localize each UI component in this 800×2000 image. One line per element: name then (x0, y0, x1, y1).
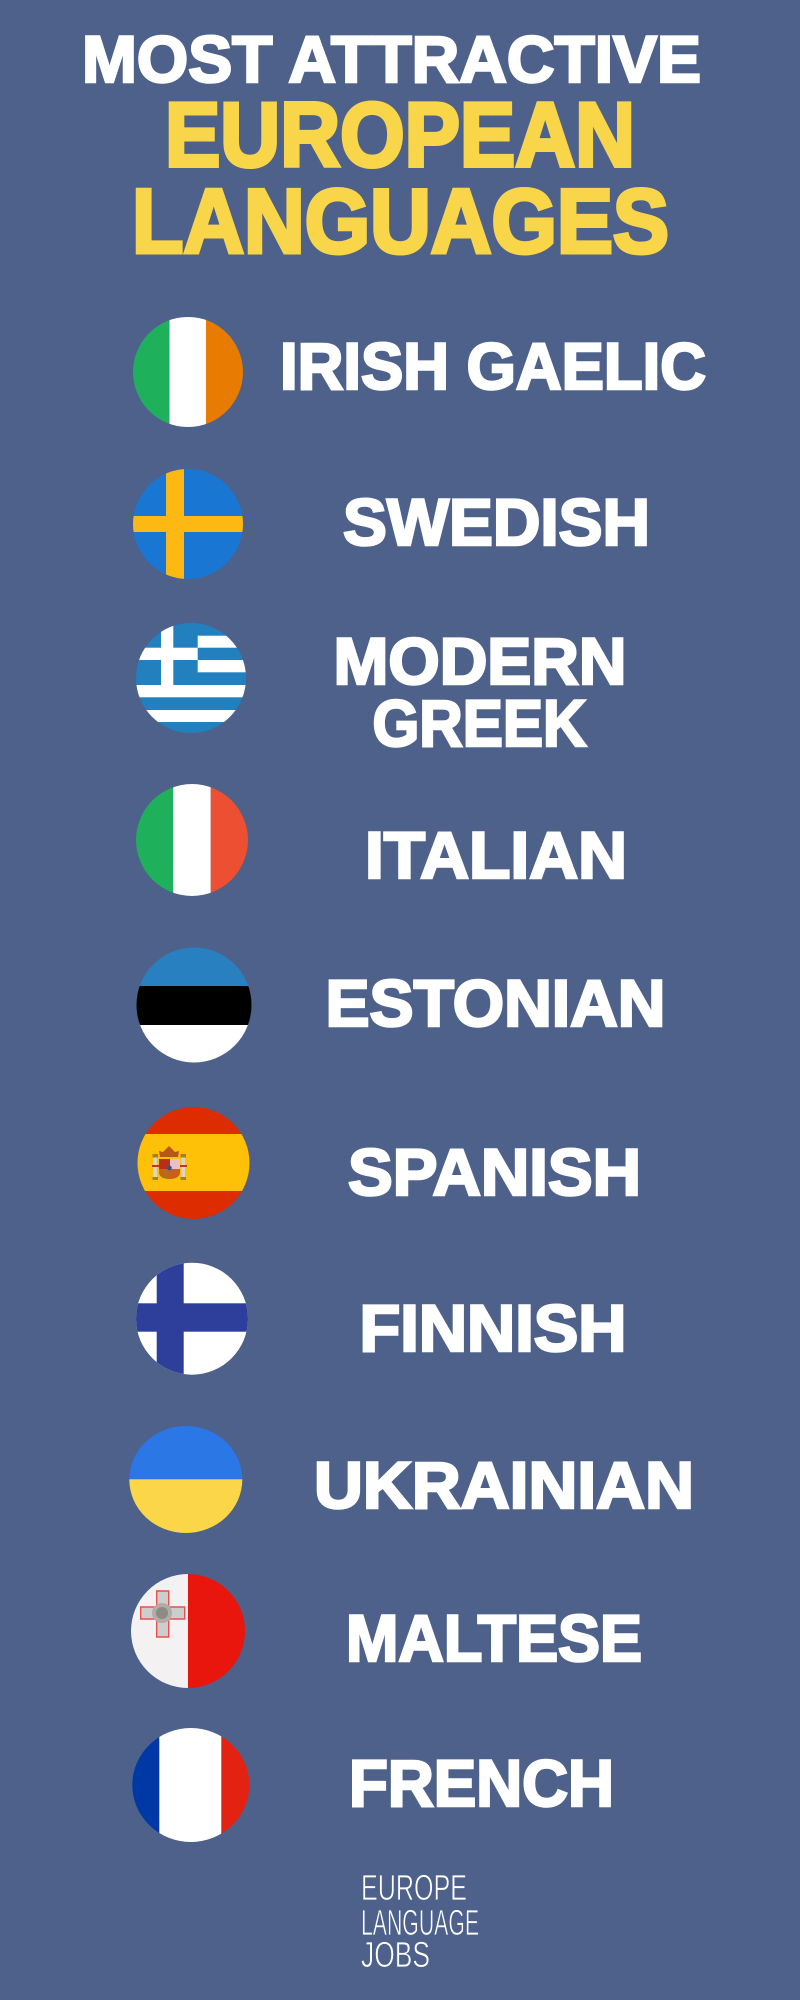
logo: Europe Language Jobs: EUROPE (361, 1867, 467, 1908)
title line: european: EUROPEAN (165, 85, 635, 186)
row: French (131, 1727, 614, 1843)
label: Modern Greek: GREEK (372, 686, 587, 760)
row: Ukrainian (129, 1425, 694, 1534)
row: Italian (136, 784, 627, 896)
icon: Estonian flag (136, 947, 252, 1064)
title (82, 22, 701, 272)
label: Finnish: FINNISH (360, 1291, 626, 1365)
label: Swedish: SWEDISH (343, 485, 650, 559)
logo: Europe Language Jobs: LANGUAGE (361, 1902, 479, 1943)
icon: Spanish flag (137, 1107, 250, 1219)
label: Irish Gaelic: IRISH GAELIC (280, 329, 706, 403)
logo: Europe Language Jobs: JOBS (361, 1934, 430, 1975)
label: French: FRENCH (349, 1746, 614, 1820)
label: Ukrainian: UKRAINIAN (314, 1448, 694, 1522)
row: Modern Greek (136, 623, 626, 760)
row: Swedish (133, 469, 650, 579)
icon: Ukrainian flag (129, 1425, 243, 1534)
label: Italian: ITALIAN (365, 818, 627, 892)
label: Estonian: ESTONIAN (326, 966, 666, 1040)
row: Spanish (137, 1107, 641, 1219)
row: Irish Gaelic (133, 317, 706, 427)
icon: Swedish flag (133, 469, 243, 579)
logo: Europe Language Jobs (361, 1867, 479, 1975)
icon: George Cross (141, 1591, 185, 1637)
label: Modern Greek (334, 624, 626, 760)
row: Finnish (136, 1262, 626, 1375)
icon: Maltese flag (131, 1574, 245, 1688)
icon: Irish flag (133, 317, 243, 427)
icon: Finnish flag (136, 1262, 248, 1375)
icon: Greek flag (136, 623, 248, 733)
label: Maltese: MALTESE (346, 1601, 642, 1675)
title line: languages: LANGUAGES (132, 172, 669, 272)
icon: Italian flag (136, 784, 249, 896)
label: Spanish: SPANISH (348, 1135, 641, 1209)
row: Estonian (136, 947, 666, 1064)
icon: French flag (131, 1727, 250, 1843)
icon: Spanish coat of arms (152, 1146, 187, 1180)
row: Maltese (131, 1574, 642, 1688)
label: Modern Greek: MODERN (334, 624, 626, 698)
title line: most attractive: MOST ATTRACTIVE (82, 22, 701, 96)
